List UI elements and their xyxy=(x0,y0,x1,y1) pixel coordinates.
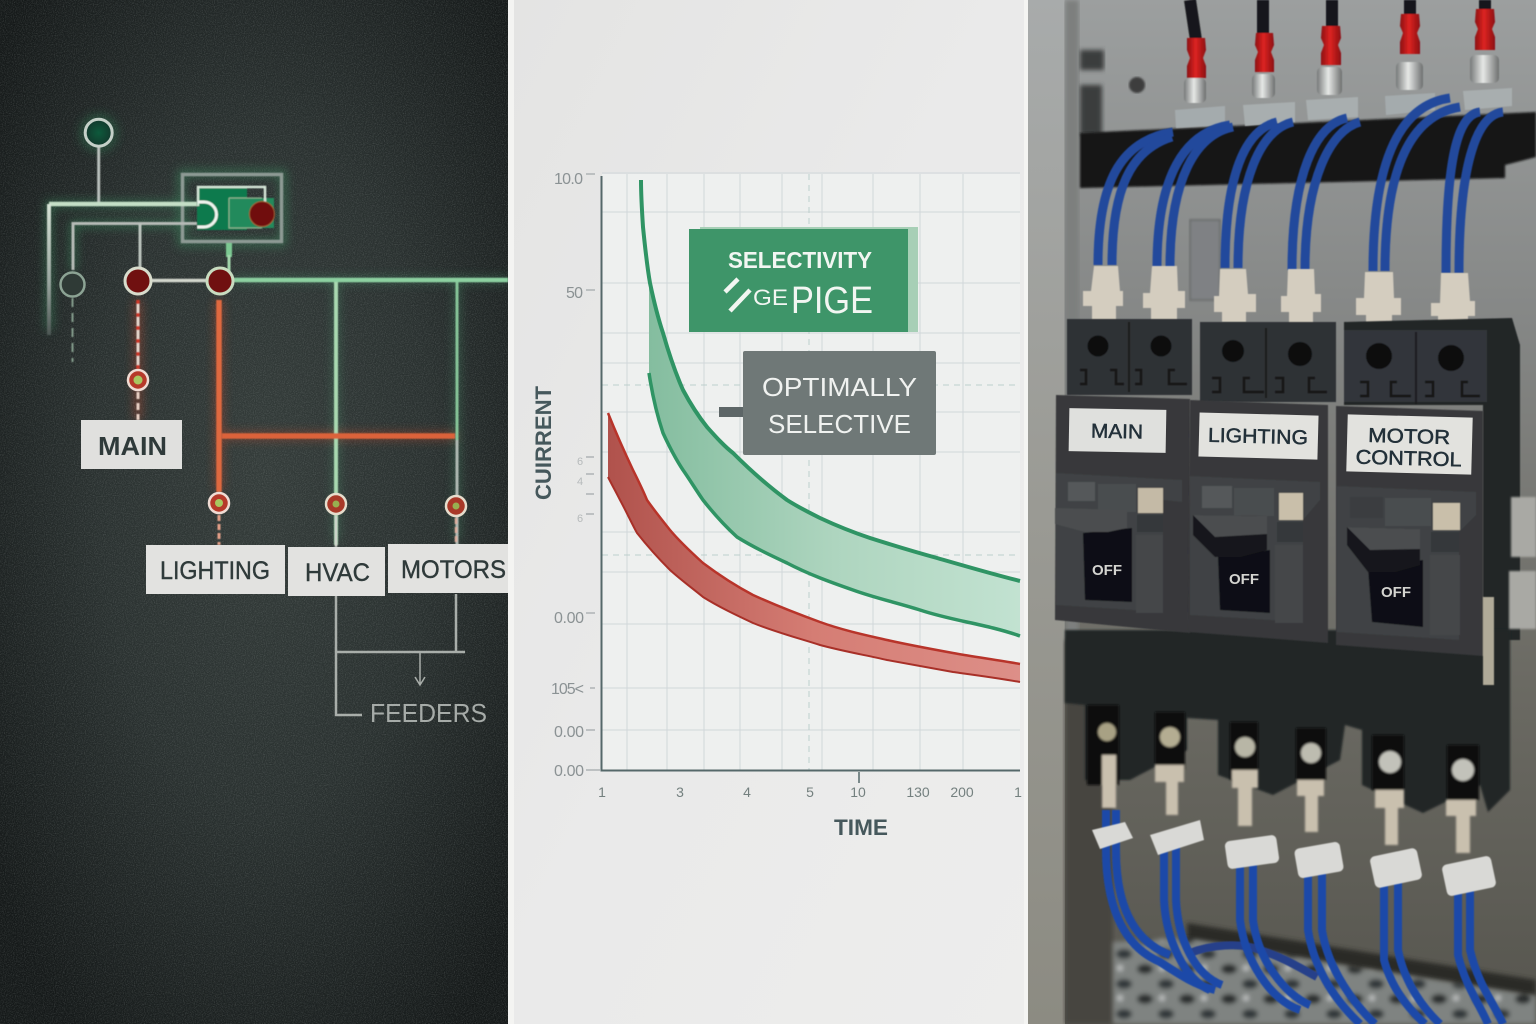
main breaker symbol xyxy=(182,174,282,272)
node: source xyxy=(85,119,112,146)
x-axis values: 4 xyxy=(743,784,751,800)
callout: selectivity: SELECTIVITY xyxy=(728,247,872,273)
feeder branch lines with arrow xyxy=(336,594,465,715)
label: main: MAIN xyxy=(98,431,167,461)
breaker: main xyxy=(1055,395,1190,633)
side tabs xyxy=(1509,497,1536,629)
node: main feeder xyxy=(128,370,148,390)
axis title: time: TIME xyxy=(834,815,888,840)
breaker label: lighting xyxy=(1198,412,1319,460)
label: hvac: HVAC xyxy=(305,559,370,587)
x-axis values: 5 xyxy=(806,784,814,800)
callout: optimally selective xyxy=(719,351,936,455)
glow behind the circuit lines xyxy=(49,118,508,540)
label: motors: MOTORS xyxy=(401,556,506,584)
y-axis values: 0.00 xyxy=(554,610,584,627)
callout: selectivity xyxy=(689,227,918,332)
x-axis values: 1 xyxy=(598,784,606,800)
chart axes xyxy=(602,176,1020,770)
chart grid xyxy=(602,173,1020,770)
label: main xyxy=(81,420,182,469)
y-axis values: 0.00 xyxy=(554,724,584,741)
y-axis values xyxy=(551,171,584,780)
x-axis values: 10 xyxy=(850,784,866,800)
y-axis values: 0.00 xyxy=(554,763,584,780)
x-axis values: 3 xyxy=(676,784,684,800)
white cable clips xyxy=(1092,820,1497,897)
perforated plate with shadow xyxy=(1113,923,1536,1024)
switch text: main off: OFF xyxy=(1092,562,1122,579)
breaker label: motor control xyxy=(1346,414,1473,475)
y-axis ticks xyxy=(586,174,600,770)
top cables and red ferrules xyxy=(1175,0,1512,128)
terminal screws and ferrules xyxy=(1087,705,1479,853)
switch text: lighting off: OFF xyxy=(1229,571,1259,588)
breaker lower housing xyxy=(1065,630,1510,813)
axis title: current: CUIRRENT xyxy=(531,385,556,500)
x-axis values xyxy=(598,784,1022,800)
label: lighting: LIGHTING xyxy=(160,557,270,585)
y-axis values: 6 xyxy=(577,456,583,468)
breaker label: lighting: LIGHTING xyxy=(1208,425,1308,449)
x-axis values: 130 xyxy=(906,784,930,800)
lower blue wires xyxy=(1106,810,1503,1024)
cream wire ferrules xyxy=(1083,266,1475,327)
callout: optimally selective: OPTIMALLY xyxy=(762,372,917,402)
x-axis tick xyxy=(858,772,860,783)
blue jumper wires xyxy=(1098,98,1503,273)
switch text: motor off: OFF xyxy=(1381,584,1411,601)
green curve band xyxy=(641,180,1020,636)
callout: selectivity: GE xyxy=(753,285,788,310)
x-axis values: 1 xyxy=(1014,784,1022,800)
node: closed breaker two xyxy=(207,268,233,294)
x-axis values: 200 xyxy=(950,784,974,800)
breaker label: motor control: MOTOR xyxy=(1368,425,1450,449)
y-axis values: 6 xyxy=(577,513,583,525)
breaker: motor control xyxy=(1336,406,1494,685)
y-axis values: 50 xyxy=(566,285,583,302)
node: closed breaker one xyxy=(125,268,151,294)
node: motors feeder xyxy=(446,496,466,516)
panel: single-line diagram xyxy=(0,0,508,1024)
label: feeders: FEEDERS xyxy=(370,698,487,728)
black mounting bar xyxy=(1080,112,1536,188)
y-axis values: 105< xyxy=(551,681,584,698)
breaker label: main xyxy=(1069,408,1166,453)
node: hvac feeder xyxy=(326,494,346,514)
label: motors xyxy=(388,544,508,593)
node: open branch xyxy=(60,272,84,296)
label: hvac xyxy=(288,547,385,596)
circuit lines xyxy=(49,146,508,547)
panel: time-current chart xyxy=(514,0,1024,1024)
node: lighting feeder xyxy=(209,493,229,513)
breaker label: main: MAIN xyxy=(1091,421,1143,443)
callout: optimally selective: SELECTIVE xyxy=(768,409,911,439)
red curve band xyxy=(608,413,1020,682)
cabinet backplate xyxy=(1028,0,1536,1024)
breaker top blocks xyxy=(1067,318,1520,640)
y-axis values: 4 xyxy=(577,476,583,488)
callout: selectivity: PIGE xyxy=(791,280,873,322)
breaker: lighting xyxy=(1188,400,1328,643)
breaker label: motor control: CONTROL xyxy=(1355,447,1462,471)
panel: breaker photo xyxy=(1028,0,1536,1024)
label: lighting xyxy=(146,545,285,594)
y-axis values: 10.0 xyxy=(554,171,583,188)
